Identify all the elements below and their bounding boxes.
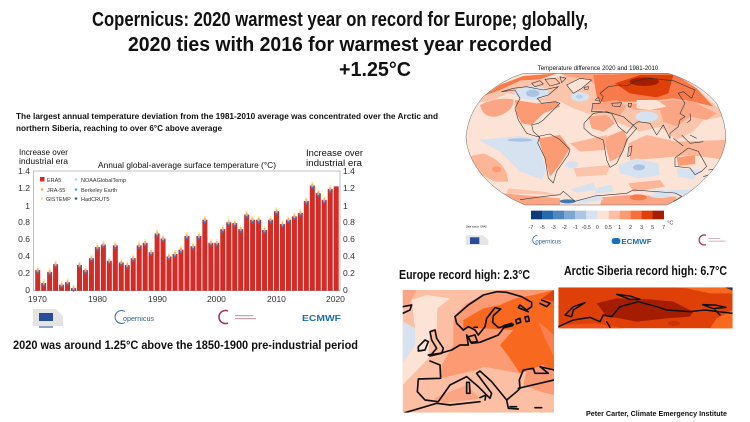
data source note: Data source: ERA5: [466, 224, 487, 228]
logo: ECMWF: ECMWF: [302, 313, 341, 323]
colour bar labels: -3: [551, 225, 556, 231]
left y axis labels: 1.4: [18, 166, 30, 176]
map outline: [466, 73, 726, 205]
title: +1.25°C: [339, 59, 411, 81]
title: [92, 9, 588, 81]
colour bar labels: -5: [540, 225, 545, 231]
caption: pre-industrial comparison: 2020 was around 1.25°C above the 1850-1900 pre-industrial period: [13, 338, 358, 352]
legend: [40, 177, 126, 203]
logo: ECMWF: ECMWF: [621, 237, 652, 246]
map title: Temperature difference 2020 and 1981-2010: [538, 65, 659, 72]
left y axis labels: 0.8: [18, 217, 30, 227]
colour bar: [531, 211, 664, 219]
north salmon belt: [473, 73, 723, 140]
logo: Copernicus: [533, 235, 561, 246]
logo: European Commission: [466, 235, 488, 245]
Europe coastlines: [403, 292, 554, 413]
right y axis labels: 0.6: [343, 234, 355, 244]
bar chart: annual global-average surface temperature: [18, 147, 363, 304]
title: Copernicus: 2020 warmest year on record for Europe; globally,: [92, 9, 588, 31]
legend: NOAAGlobalTemp: [81, 178, 126, 184]
colour bar labels: -0.5: [582, 225, 591, 231]
logo: Climate Change Service: [219, 310, 256, 324]
colour bar labels: -2: [562, 225, 567, 231]
logo: Copernicus: opernicus: [535, 239, 561, 246]
right y axis labels: 0.4: [343, 251, 355, 261]
x axis labels: 2020: [326, 294, 345, 304]
panel: global temperature map: [460, 65, 733, 246]
legend: HadCRUT5: [81, 197, 109, 203]
x axis labels: 2010: [267, 294, 286, 304]
subtitle text block: The largest annual temperature deviation from the 1981-2010 average was concentrated over the Arctic and: [16, 111, 438, 121]
left axis heading: industrial era: [19, 156, 68, 166]
x axis labels: 2000: [207, 294, 226, 304]
right y axis labels: 0: [343, 285, 348, 295]
right y axis labels: 1.4: [343, 166, 355, 176]
right axis heading: industrial era: [306, 158, 362, 168]
colour bar labels: 0.5: [605, 225, 612, 231]
colour bar labels: -1: [573, 225, 578, 231]
subtitle text block: northern Siberia, reaching to over 6°C above average: [16, 123, 222, 133]
left y axis labels: 0.6: [18, 234, 30, 244]
colour bar labels: 2: [629, 225, 632, 231]
logo: European Commission: [33, 309, 63, 328]
Siberia coastlines: [558, 294, 733, 327]
x axis labels: 1980: [88, 294, 107, 304]
logo: Climate Change Service: [699, 235, 726, 245]
colour bar labels: 3: [640, 225, 643, 231]
legend: GISTEMP: [46, 197, 71, 203]
right y axis labels: 1: [343, 201, 348, 211]
colour bar labels: 5: [651, 225, 654, 231]
left axis heading: [19, 147, 68, 166]
colour bar labels: [529, 220, 673, 231]
colour bar labels: 7: [662, 225, 665, 231]
map anomaly shading: [466, 74, 726, 205]
panel: Europe map: [403, 290, 554, 413]
colour bar labels: -7: [529, 225, 533, 231]
logo: Copernicus: [115, 311, 154, 324]
colour bar labels: 0: [596, 225, 599, 231]
legend: JRA-55: [47, 188, 65, 194]
left y axis labels: 0.4: [18, 251, 30, 261]
x axis labels: 1990: [148, 294, 167, 304]
data points: other datasets: [38, 182, 330, 291]
colour bar labels: °C: [667, 220, 673, 226]
legend: ERA5: [47, 178, 61, 184]
heading: Europe record high: Europe record high: 2.3°C: [399, 268, 530, 282]
right axis heading: Increase over: [306, 148, 363, 158]
bars: ERA5: [35, 186, 339, 291]
x axis labels: [28, 294, 345, 304]
right y axis labels: 0.8: [343, 217, 355, 227]
left axis heading: Increase over: [19, 147, 68, 157]
title: 2020 ties with 2016 for warmest year recorded: [128, 34, 552, 56]
continent outlines: [502, 77, 718, 202]
left y axis labels: 0.2: [18, 268, 30, 278]
right y axis labels: [343, 166, 355, 295]
left y axis labels: 1.2: [18, 183, 30, 193]
subtitle text block: [16, 111, 438, 133]
left y axis labels: [18, 166, 30, 295]
right y axis labels: 1.2: [343, 183, 355, 193]
left y axis labels: 1: [25, 201, 30, 211]
right axis heading: [306, 148, 363, 168]
logo: Copernicus: opernicus: [123, 314, 154, 323]
panel: Arctic Siberia map: [558, 287, 733, 328]
colour bar labels: 1: [618, 225, 621, 231]
right y axis labels: 0.2: [343, 268, 355, 278]
x axis labels: 1970: [28, 294, 47, 304]
attribution: Peter Carter, Climate Emergency Institute: [586, 409, 727, 418]
legend: Berkeley Earth: [81, 188, 117, 194]
left y axis labels: 0: [25, 285, 30, 295]
chart title: Annual global-average surface temperature (°C): [98, 160, 276, 170]
